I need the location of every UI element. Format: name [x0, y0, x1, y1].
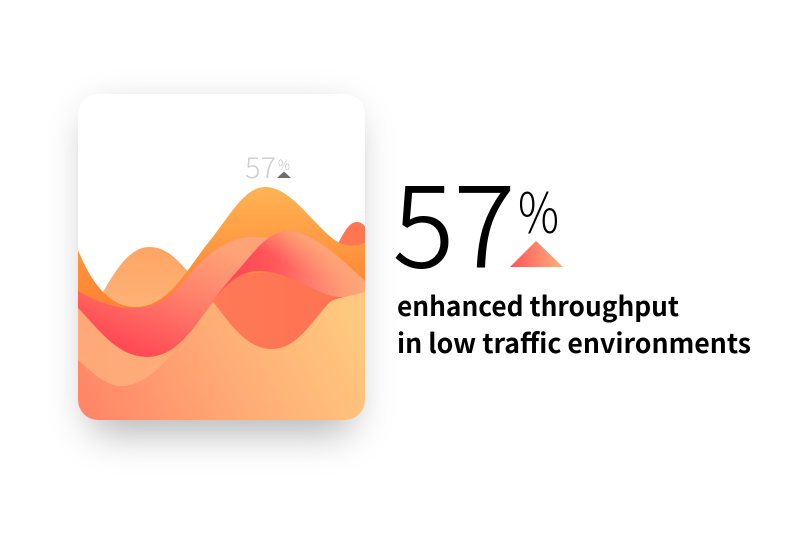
wave: coral right bump — [338, 222, 365, 246]
small value label: 57 — [245, 145, 276, 187]
wave: pink ribbon — [213, 231, 367, 301]
caption text — [397, 285, 751, 361]
wave: front area — [78, 291, 367, 422]
small percent sign: % — [278, 155, 290, 175]
wave: peach hump — [103, 247, 188, 307]
small value label — [245, 145, 290, 187]
icon: gradient up triangle — [510, 241, 563, 267]
big stat: 57%: 57 — [393, 135, 515, 300]
wave: light peach band — [78, 308, 169, 386]
wave: coral middle — [206, 272, 343, 349]
big percent sign: % — [518, 169, 559, 250]
card shadow — [88, 110, 355, 434]
wave: salmon to red ribbon — [78, 237, 285, 357]
caption text: in low traffic environments — [397, 322, 751, 361]
wave: orange mountain — [78, 187, 365, 357]
area chart — [78, 187, 367, 422]
caption text: enhanced throughput — [397, 285, 679, 324]
panel: chart card — [78, 94, 367, 422]
wave: pink ribbon highlight — [260, 231, 360, 278]
icon: small up triangle — [277, 172, 291, 178]
